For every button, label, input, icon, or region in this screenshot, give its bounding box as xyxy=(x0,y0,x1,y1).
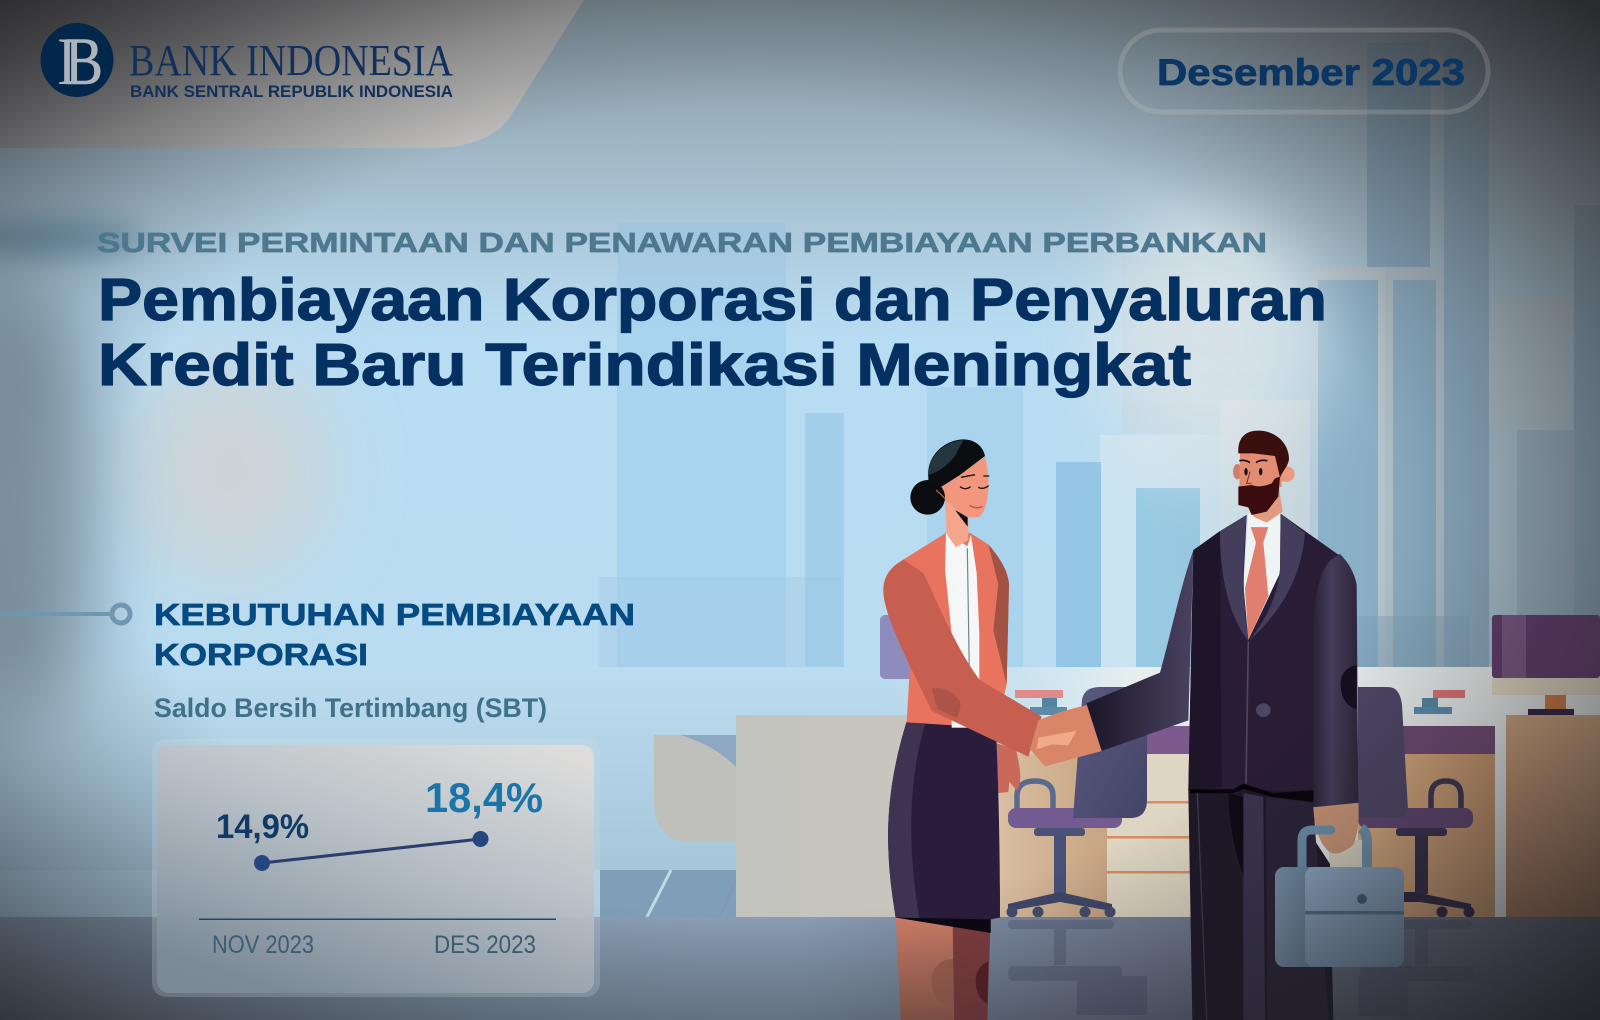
logo tagline: BANK SENTRAL REPUBLIK INDONESIA xyxy=(130,83,453,101)
axis xyxy=(199,918,556,920)
skyline buildings xyxy=(599,43,1600,667)
main title: Pembiayaan Korporasi dan Penyaluran xyxy=(98,267,1327,333)
line chart xyxy=(254,831,488,871)
logo emblem: B xyxy=(65,23,103,99)
logo emblem: I xyxy=(57,23,77,99)
office furniture xyxy=(0,615,1600,1020)
briefcase xyxy=(1275,828,1404,967)
date pill xyxy=(1120,30,1488,112)
axis label november: NOV 2023 xyxy=(212,931,314,959)
logo wordmark: BANK INDONESIA xyxy=(129,36,453,85)
panel: line chart card xyxy=(152,739,600,997)
man trousers xyxy=(1188,789,1333,1020)
logo panel xyxy=(0,0,584,148)
main title: Kredit Baru Terindikasi Meningkat xyxy=(98,332,1191,398)
back floor band xyxy=(600,870,740,918)
section heading xyxy=(154,597,635,672)
woman arm xyxy=(883,560,1042,757)
right grey haze xyxy=(1150,0,1600,667)
woman hanging hand xyxy=(997,743,1020,793)
section heading: KORPORASI xyxy=(154,637,368,672)
chair center xyxy=(1006,687,1147,918)
logo emblem xyxy=(40,23,114,99)
main title xyxy=(98,267,1327,398)
section heading: KEBUTUHAN PEMBIAYAAN xyxy=(154,597,635,632)
man hand holding bag xyxy=(1313,803,1359,853)
value desember: 18,4% xyxy=(425,774,543,821)
chair reflections xyxy=(1008,920,1473,1016)
top grey haze xyxy=(0,0,1600,340)
woman jacket xyxy=(883,533,1042,757)
kicker heading: SURVEI PERMINTAAN DAN PENAWARAN PEMBIAYAAN PERBANKAN xyxy=(97,227,1267,258)
purple chair back xyxy=(880,615,920,679)
desk right xyxy=(1329,726,1495,917)
books left xyxy=(1015,690,1067,715)
books right xyxy=(1414,690,1465,714)
man head xyxy=(1233,431,1295,523)
chair right xyxy=(1358,687,1474,918)
beige chair left xyxy=(647,735,737,917)
floor xyxy=(0,917,1600,1020)
left swoosh glow xyxy=(0,210,1320,720)
man jacket xyxy=(1087,514,1358,808)
handshake xyxy=(1030,705,1102,766)
logo: Bank Indonesia xyxy=(40,23,453,101)
cabinet right xyxy=(1506,715,1600,917)
woman head xyxy=(910,439,989,547)
man shirt and tie xyxy=(1243,514,1280,640)
illustration: man xyxy=(1030,431,1404,1020)
section marker xyxy=(0,605,130,623)
wall band xyxy=(0,667,1600,870)
woman skirt xyxy=(888,722,1000,933)
monitor xyxy=(1492,615,1600,715)
section subheading: Saldo Bersih Tertimbang (SBT) xyxy=(154,693,547,723)
date pill: Desember 2023 xyxy=(1157,52,1465,93)
woman legs xyxy=(896,914,991,1020)
value november: 14,9% xyxy=(216,808,309,846)
illustration: woman xyxy=(883,439,1042,1020)
axis label desember: DES 2023 xyxy=(434,931,536,959)
desk xyxy=(736,715,1195,917)
